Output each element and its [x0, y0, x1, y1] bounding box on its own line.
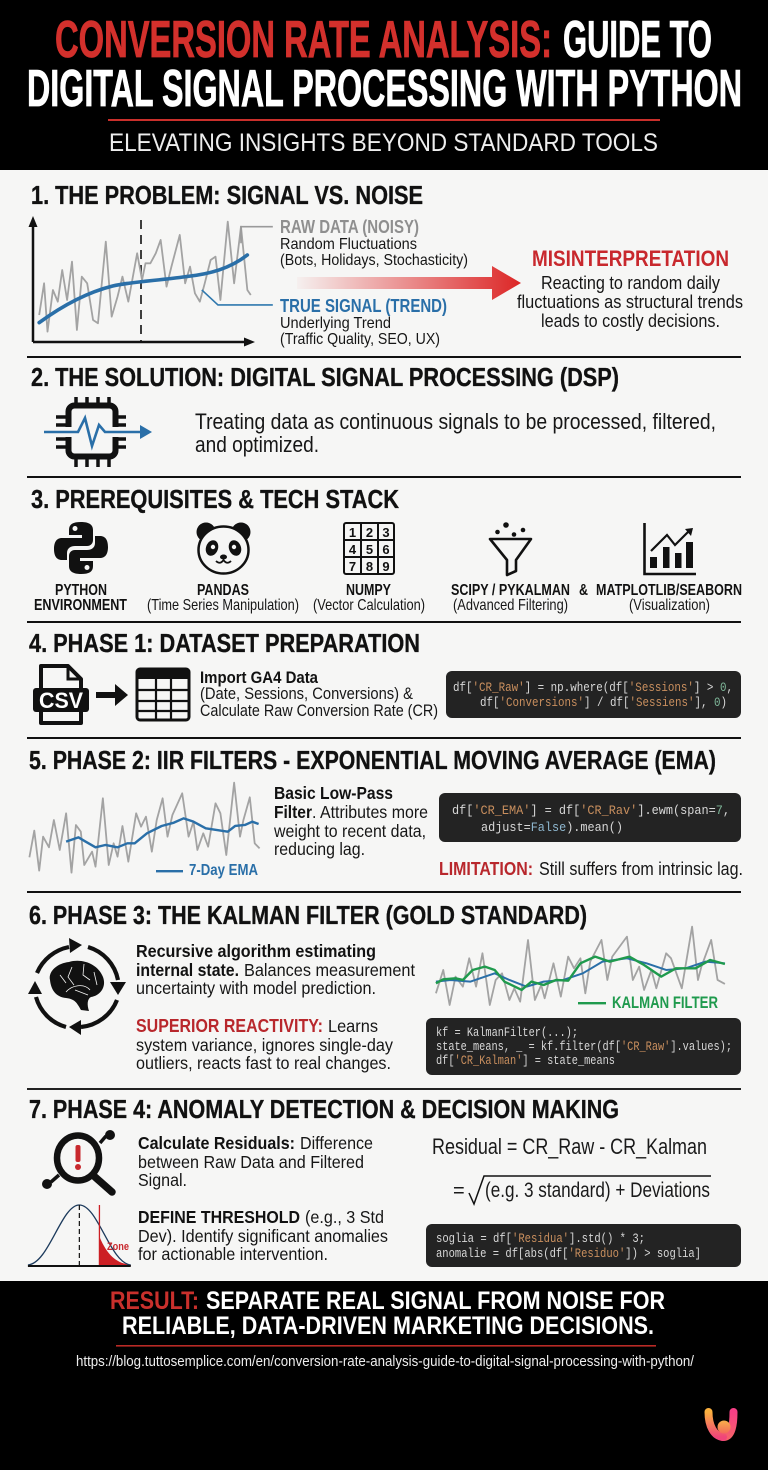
threshold text: [138, 1207, 388, 1264]
icon: bell curve threshold: [28, 1205, 131, 1266]
ema description: weight to recent data,: [273, 821, 426, 841]
misinterpretation callout: leads to costly decisions.: [541, 311, 720, 331]
kalman description: Recursive algorithm estimating: [136, 941, 376, 961]
result line 1: SEPARATE REAL SIGNAL FROM NOISE FOR: [206, 1287, 665, 1315]
solution text line 2: and optimized.: [195, 432, 319, 457]
icon: numpy grid: 3: [382, 525, 390, 540]
residuals text: Difference: [300, 1133, 373, 1153]
code block: raw cr: [446, 671, 741, 718]
misinterpretation callout: MISINTERPRETATION: [532, 246, 729, 271]
icon: csv file: [33, 666, 89, 723]
limitation note: LIMITATION:: [439, 859, 533, 879]
chart: ema: [29, 783, 260, 873]
formula: threshold root: [453, 1176, 711, 1204]
label: numpy: NUMPY: [346, 582, 392, 599]
panel: section 3 tech stack: [31, 484, 742, 614]
formula: threshold root: (e.g. 3 standard) + Deviations: [485, 1179, 710, 1202]
icon: magnifier with alert: [42, 1130, 115, 1192]
label: pandas: (Time Series Manipulation): [147, 597, 299, 614]
import text: Import GA4 Data: [200, 669, 319, 687]
code block: anomaly: anomalie = df[abs(df['Residuo']) > soglia]: [436, 1246, 701, 1261]
label: matplotlib seaborn: [596, 582, 742, 614]
icon: bar chart with trend: [644, 523, 696, 574]
code block: kalman: state_means, _ = kf.filter(df['CR_Raw'].values);: [436, 1039, 732, 1054]
icon: chip with signal: [44, 397, 152, 467]
raw data description 1: Random Fluctuations: [280, 236, 417, 253]
heading 4: 4. PHASE 1: DATASET PREPARATION: [29, 628, 420, 658]
kalman description: uncertainty with model prediction.: [136, 978, 376, 998]
icon: funnel: [490, 522, 531, 575]
residuals text: [138, 1133, 373, 1190]
threshold text: Dev). Identify significant anomalies: [138, 1226, 388, 1246]
label: scipy pykalman: (Advanced Filtering): [453, 597, 568, 614]
icon: bell curve threshold: Zone: [107, 1241, 129, 1253]
ema description: [273, 783, 428, 859]
misinterpretation callout: [517, 246, 743, 331]
label: true signal: TRUE SIGNAL (TREND): [280, 296, 447, 316]
ema description: reducing lag.: [274, 839, 365, 859]
code block: raw cr: df['Conversions'] / df['Sessiens'], 0): [480, 695, 727, 710]
icon: numpy grid: 9: [382, 559, 390, 574]
threshold text: DEFINE THRESHOLD: [138, 1207, 300, 1227]
arrow: gradient red: [297, 266, 521, 300]
source url: https://blog.tuttosemplice.com/en/conversion-rate-analysis-guide-to-digital-signal-processing-with-python/: [76, 1353, 695, 1370]
import text: [200, 669, 438, 720]
legend: 7-day ema: 7-Day EMA: [189, 862, 258, 879]
result label: RESULT:: [110, 1287, 199, 1315]
legend: 7-day ema: [156, 862, 258, 879]
kalman description: [136, 941, 415, 998]
formula: threshold root: =: [453, 1180, 465, 1202]
formula: residual: Residual = CR_Raw - CR_Kalman: [432, 1134, 707, 1159]
arrow: csv to table: [96, 684, 128, 706]
icon: numpy grid: 7: [349, 559, 356, 574]
superior reactivity text: Learns: [328, 1016, 378, 1036]
ema description: . Attributes more: [312, 802, 428, 822]
panel: section 6 kalman: [28, 900, 741, 1075]
label: python environment: PYTHON: [55, 582, 107, 599]
superior reactivity text: outliers, reacts fast to real changes.: [136, 1053, 391, 1073]
code block: anomaly: [426, 1224, 741, 1267]
limitation note: Still suffers from intrinsic lag.: [539, 859, 743, 879]
residuals text: Signal.: [138, 1170, 187, 1190]
threshold text: for actionable intervention.: [138, 1244, 328, 1264]
import text: Calculate Raw Conversion Rate (CR): [200, 702, 438, 720]
true signal description 1: Underlying Trend: [280, 315, 391, 332]
superior reactivity text: system variance, ignores single-day: [136, 1035, 393, 1055]
label: python environment: ENVIRONMENT: [34, 597, 127, 614]
ema description: Filter: [274, 802, 312, 822]
icon: table: [137, 669, 189, 720]
code block: anomaly: soglia = df['Residua'].std() * 3;: [436, 1231, 645, 1246]
icon: numpy grid: 4: [349, 542, 357, 557]
label: raw data: RAW DATA (NOISY): [280, 217, 419, 237]
superior reactivity text: SUPERIOR REACTIVITY:: [136, 1016, 323, 1036]
subtitle: ELEVATING INSIGHTS BEYOND STANDARD TOOLS: [109, 129, 658, 157]
footer banner: [0, 1281, 768, 1470]
heading 6: 6. PHASE 3: THE KALMAN FILTER (GOLD STANDARD): [29, 900, 587, 930]
kalman description: Balances measurement: [244, 960, 415, 980]
icon: numpy grid: [344, 523, 394, 574]
code block: raw cr: df['CR_Raw'] = np.where(df['Sessions'] > 0,: [453, 680, 733, 695]
code block: kalman: df['CR_Kalman'] = state_means: [436, 1053, 615, 1068]
label: pandas: [147, 582, 299, 614]
code block: ema: [439, 793, 741, 842]
icon: brain with cycle arrows: [28, 938, 126, 1035]
label: pandas: PANDAS: [197, 582, 249, 599]
misinterpretation callout: fluctuations as structural trends: [517, 292, 743, 312]
panel: section 4 dataset preparation: [29, 628, 741, 723]
chart: kalman: [436, 927, 725, 1005]
label: numpy: (Vector Calculation): [313, 597, 425, 614]
heading 7: 7. PHASE 4: ANOMALY DETECTION & DECISION MAKING: [29, 1094, 619, 1124]
panel: section 1 the problem: [28, 180, 743, 348]
raw data description 2: (Bots, Holidays, Stochasticity): [280, 252, 468, 269]
limitation note: [439, 859, 743, 879]
true signal description 2: (Traffic Quality, SEO, UX): [280, 331, 440, 348]
code block: kalman: [426, 1018, 741, 1075]
label: scipy pykalman: [451, 582, 570, 614]
icon: logo: [708, 1412, 734, 1437]
icon: numpy grid: 8: [366, 559, 373, 574]
code block: ema: adjust=False).mean(): [481, 820, 623, 835]
result line 2: RELIABLE, DATA-DRIVEN MARKETING DECISIONS.: [122, 1312, 654, 1340]
threshold text: (e.g., 3 Std: [305, 1207, 384, 1227]
icon: panda: [196, 522, 250, 574]
chart: signal vs noise: [28, 216, 273, 346]
icon: numpy grid: 5: [366, 542, 373, 557]
residuals text: Calculate Residuals:: [138, 1133, 295, 1153]
icon: csv file: CSV: [39, 688, 83, 713]
label: scipy pykalman: SCIPY / PYKALMAN: [451, 582, 570, 599]
superior reactivity text: [136, 1016, 393, 1073]
panel: section 2 the solution: [31, 362, 716, 467]
heading 1: 1. THE PROBLEM: SIGNAL VS. NOISE: [31, 180, 423, 210]
label: matplotlib seaborn: (Visualization): [629, 597, 710, 614]
ema description: Basic Low-Pass: [274, 783, 393, 803]
code block: kalman: kf = KalmanFilter(...);: [436, 1025, 578, 1040]
icon: numpy grid: 6: [382, 542, 390, 557]
label: ampersand: &: [579, 582, 588, 599]
residuals text: between Raw Data and Filtered: [138, 1152, 364, 1172]
header banner: [0, 0, 768, 170]
heading 3: 3. PREREQUISITES & TECH STACK: [31, 484, 399, 514]
kalman description: internal state.: [136, 960, 239, 980]
code block: ema: df['CR_EMA'] = df['CR_Rav'].ewm(span=7,: [452, 803, 730, 818]
icon: numpy grid: 1: [349, 525, 356, 540]
label: numpy: [313, 582, 425, 614]
label: python environment: [34, 582, 127, 614]
heading 2: 2. THE SOLUTION: DIGITAL SIGNAL PROCESSING (DSP): [31, 362, 619, 392]
legend: kalman filter: KALMAN FILTER: [612, 994, 718, 1012]
import text: (Date, Sessions, Conversions) &: [200, 685, 413, 703]
panel: section 7 anomaly detection: [28, 1094, 741, 1267]
icon: python: [54, 522, 108, 574]
misinterpretation callout: Reacting to random daily: [541, 273, 720, 293]
icon: numpy grid: 2: [366, 525, 373, 540]
panel: section 5 ema: [29, 745, 743, 879]
